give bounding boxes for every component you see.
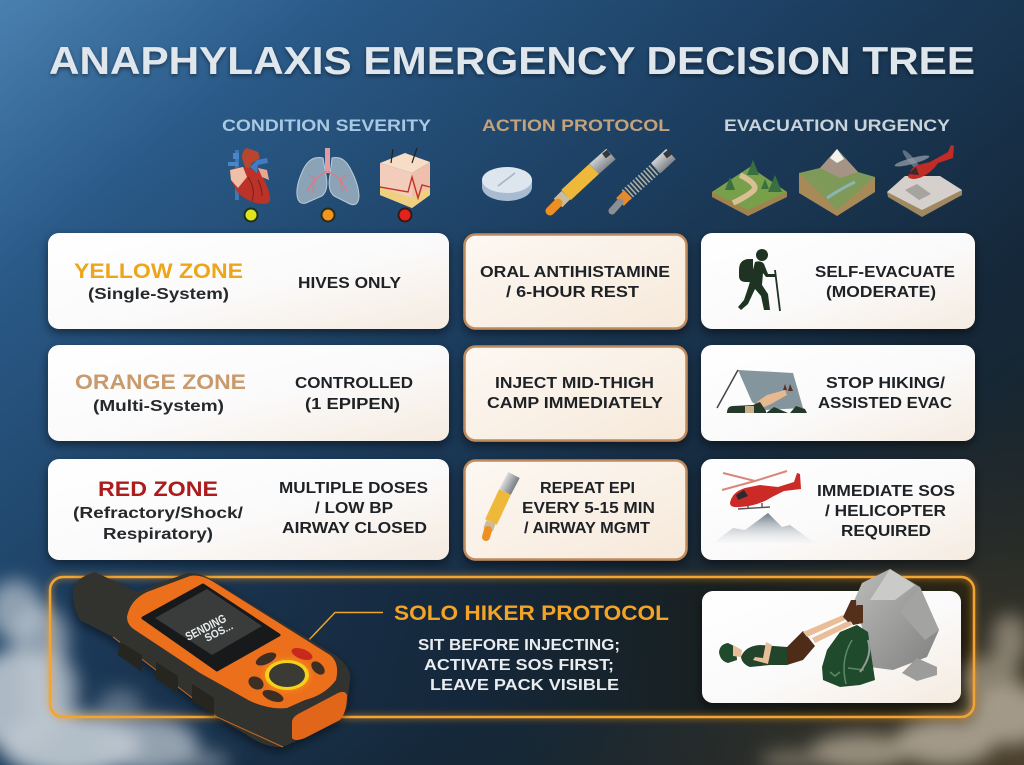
icon: helicopter over mountain bbox=[713, 471, 815, 543]
card: orange zone action bbox=[464, 346, 686, 440]
card row 3: red zone bbox=[48, 459, 975, 560]
device keypad bbox=[246, 646, 327, 704]
icon: lungs with orange dot bbox=[297, 148, 359, 222]
card: red zone action: EVERY 5-15 MIN bbox=[522, 500, 655, 517]
icon: spring injector bbox=[612, 152, 671, 211]
callout text: LEAVE PACK VISIBLE bbox=[430, 677, 619, 694]
icon: hiker lying down bbox=[719, 600, 863, 667]
icon: mountain terrain bbox=[799, 149, 875, 216]
card row 1: yellow zone bbox=[48, 233, 975, 329]
panel: solo hiker protocol bbox=[50, 569, 974, 717]
card: red zone condition bbox=[48, 459, 449, 560]
card: yellow zone evacuation: (MODERATE) bbox=[826, 284, 936, 301]
callout text: SIT BEFORE INJECTING; bbox=[418, 637, 620, 654]
card: orange zone evacuation: STOP HIKING/ bbox=[826, 375, 946, 392]
card: yellow zone action bbox=[464, 234, 686, 328]
icon: tablet bbox=[482, 167, 532, 201]
card: red zone action bbox=[464, 460, 686, 560]
illustration card: legs elevated against rock bbox=[702, 569, 961, 703]
callout text bbox=[418, 637, 620, 694]
clouds: bottom left bbox=[0, 580, 229, 765]
card: red zone action: REPEAT EPI bbox=[540, 480, 635, 497]
device side grips bbox=[118, 642, 214, 715]
card: orange zone evacuation: ASSISTED EVAC bbox=[818, 395, 952, 412]
card: red zone evacuation: / HELICOPTER bbox=[825, 503, 946, 520]
icon: satellite communicator device bbox=[73, 572, 350, 747]
card: yellow zone action: / 6-HOUR REST bbox=[506, 284, 639, 301]
heading: action protocol: ACTION PROTOCOL bbox=[482, 116, 670, 135]
card: orange zone action: CAMP IMMEDIATELY bbox=[487, 395, 663, 412]
callout text: ACTIVATE SOS FIRST; bbox=[424, 657, 614, 674]
icon: backpack bbox=[822, 625, 875, 687]
card: yellow zone action: ORAL ANTIHISTAMINE bbox=[480, 264, 670, 281]
card: orange zone condition bbox=[48, 345, 449, 441]
card: red zone condition: Respiratory) bbox=[103, 526, 213, 543]
card: red zone condition: AIRWAY CLOSED bbox=[282, 520, 427, 537]
heading: evacuation urgency: EVACUATION URGENCY bbox=[724, 116, 951, 135]
card row 2: orange zone bbox=[48, 345, 975, 441]
card: red zone evacuation bbox=[701, 459, 975, 560]
card: red zone condition: MULTIPLE DOSES bbox=[279, 480, 428, 497]
card: red zone condition: (Refractory/Shock/ bbox=[73, 505, 244, 522]
card: yellow zone evacuation bbox=[701, 233, 975, 329]
icon: hiker bbox=[738, 249, 780, 311]
heading: condition severity: CONDITION SEVERITY bbox=[222, 116, 432, 135]
device screen: SENDING bbox=[183, 611, 229, 644]
card: orange zone action: INJECT MID-THIGH bbox=[495, 375, 654, 392]
clouds: bottom right bbox=[760, 614, 1024, 765]
card: orange zone condition: ORANGE ZONE bbox=[75, 371, 246, 394]
card: red zone evacuation: IMMEDIATE SOS bbox=[817, 483, 955, 500]
card: yellow zone condition: YELLOW ZONE bbox=[74, 260, 243, 283]
card: yellow zone condition bbox=[48, 233, 449, 329]
card: orange zone evacuation bbox=[701, 345, 975, 441]
card: yellow zone evacuation: SELF-EVACUATE bbox=[815, 264, 955, 281]
icon: epinephrine pen bbox=[486, 475, 514, 537]
icon: helicopter over snowy terrain bbox=[887, 145, 962, 217]
card: yellow zone condition: HIVES ONLY bbox=[298, 275, 401, 292]
device screen bbox=[143, 585, 279, 670]
callout leader line bbox=[302, 612, 383, 646]
card: orange zone condition: (1 EPIPEN) bbox=[305, 396, 400, 413]
title: ANAPHYLAXIS EMERGENCY DECISION TREE bbox=[49, 40, 975, 83]
card: orange zone condition: CONTROLLED bbox=[295, 375, 413, 392]
card: yellow zone condition: (Single-System) bbox=[88, 286, 229, 303]
icon: resting under tarp bbox=[717, 370, 807, 413]
card: red zone action: / AIRWAY MGMT bbox=[524, 520, 650, 537]
icon: heart with yellow dot bbox=[228, 148, 270, 222]
card: red zone condition: RED ZONE bbox=[98, 478, 218, 501]
card: red zone condition: / LOW BP bbox=[315, 500, 393, 517]
icon: forest trail terrain bbox=[712, 160, 787, 216]
card: red zone evacuation: REQUIRED bbox=[841, 523, 931, 540]
panel border bbox=[50, 577, 974, 717]
callout heading: SOLO HIKER PROTOCOL bbox=[394, 602, 669, 625]
icon: boulder bbox=[853, 569, 939, 681]
icon: skin cross-section with red dot bbox=[380, 148, 430, 222]
device port cover bbox=[292, 692, 347, 740]
icon: auto-injector pen bbox=[550, 152, 611, 211]
device screen: SOS... bbox=[203, 620, 235, 645]
panel background: solo hiker band bbox=[50, 577, 974, 717]
card: orange zone condition: (Multi-System) bbox=[93, 398, 224, 415]
